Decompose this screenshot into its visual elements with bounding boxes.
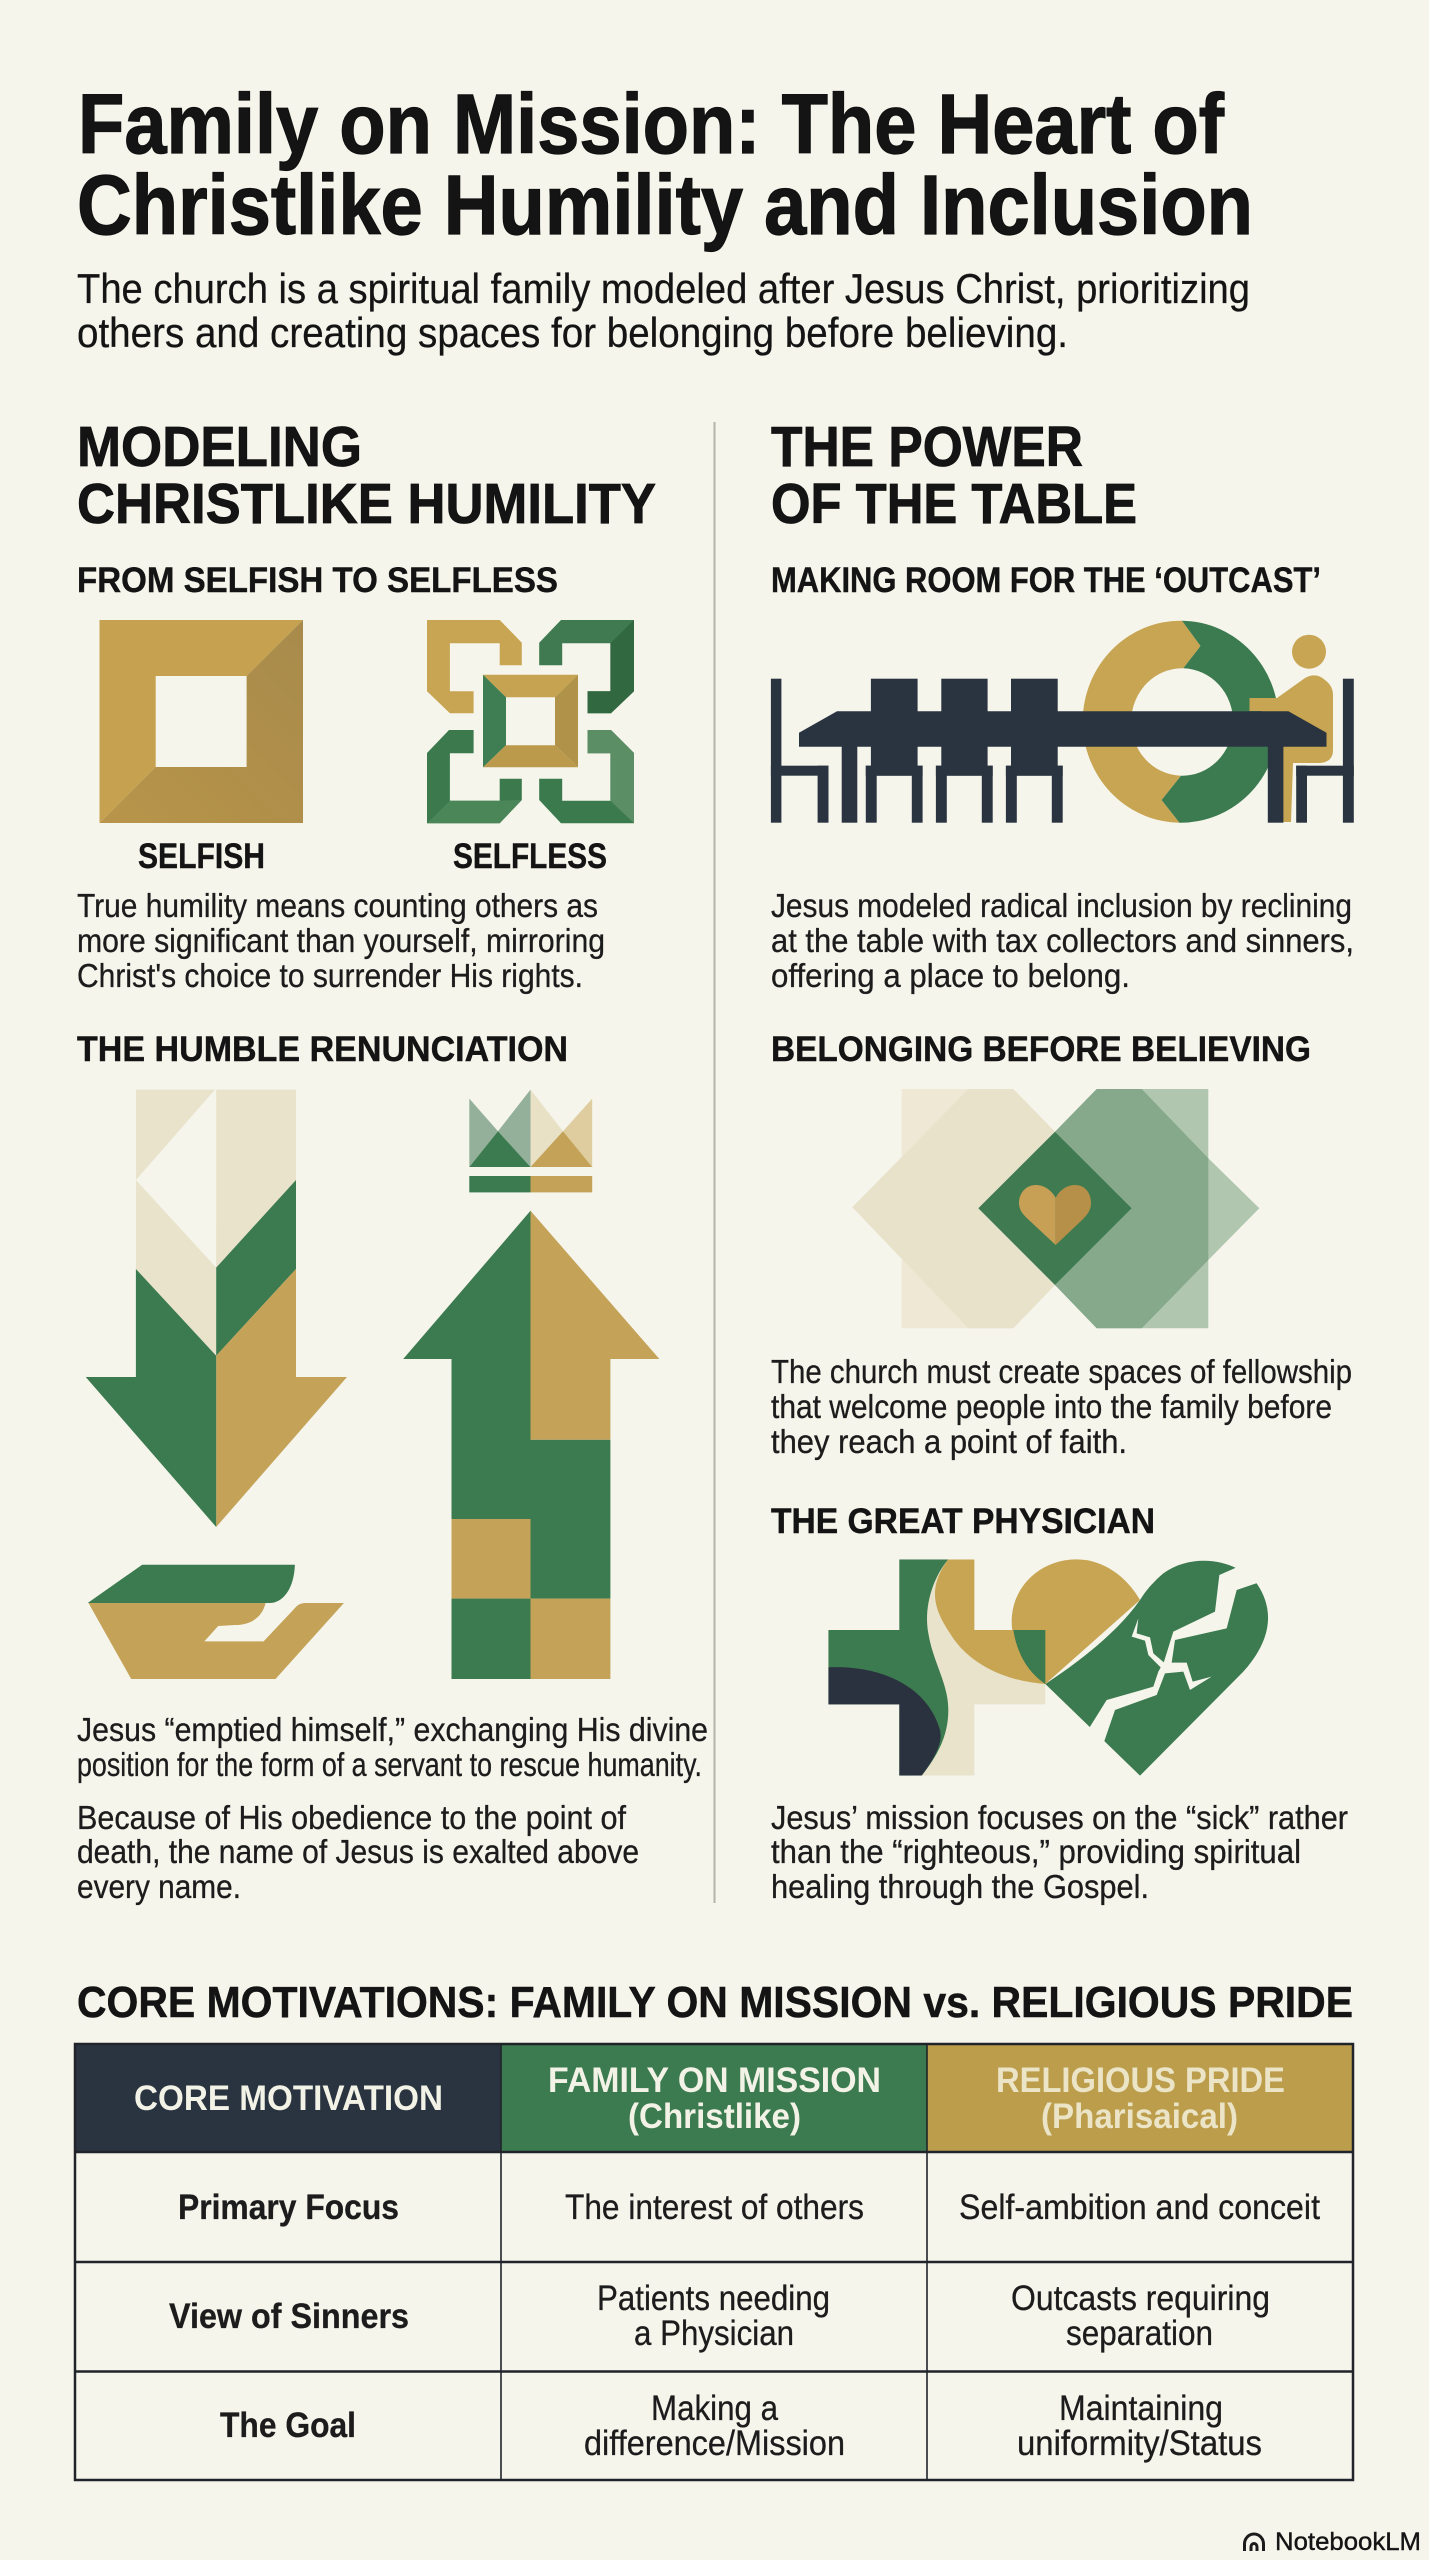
- row: the goal: Making a: [651, 2389, 778, 2428]
- row: the goal: uniformity/Status: [1017, 2424, 1262, 2463]
- text: radical inclusion: [771, 887, 1354, 994]
- icon: heart: [1019, 1185, 1091, 1245]
- table header: (Christlike): [628, 2097, 801, 2136]
- subheading: from selfish to selfless: FROM SELFISH TO SELFLESS: [77, 561, 558, 600]
- table header: RELIGIOUS PRIDE: [996, 2061, 1285, 2100]
- NotebookLM logo: [1244, 2528, 1421, 2556]
- text: spaces of fellowship: that welcome people into the family before: [771, 1388, 1332, 1425]
- title: Christlike Humility and Inclusion: [77, 158, 1253, 252]
- row: view of sinners: Patients needing: [597, 2279, 830, 2318]
- heart right side: [1045, 1561, 1268, 1776]
- row: the goal: difference/Mission: [584, 2424, 845, 2463]
- subheading: making room: MAKING ROOM FOR THE ‘OUTCAST’: [771, 561, 1321, 600]
- text: radical inclusion: at the table with tax collectors and sinners,: [771, 922, 1354, 959]
- text: obedience: every name.: [77, 1868, 241, 1905]
- row: primary focus: Primary Focus: [178, 2188, 399, 2227]
- text: emptied himself: position for the form of a servant to rescue humanity.: [77, 1746, 702, 1783]
- icon: cross and broken heart: [828, 1559, 1268, 1776]
- column divider: [714, 422, 716, 1903]
- heading: modeling Christlike humility: [77, 415, 656, 536]
- row: the goal: [220, 2389, 1262, 2463]
- title: Family on Mission: The Heart of: [78, 77, 1225, 171]
- row: view of sinners: [169, 2279, 1270, 2353]
- ring: [1083, 621, 1279, 823]
- title: [77, 77, 1253, 252]
- panel: the power of the table: [771, 415, 1354, 1905]
- subtitle: The church is a spiritual family modeled after Jesus Christ, prioritizing: [77, 265, 1250, 312]
- label: NotebookLM: NotebookLM: [1275, 2528, 1421, 2556]
- text: true humility: more significant than yourself, mirroring: [77, 922, 605, 959]
- icon: overlapping shapes with heart: [852, 1089, 1259, 1328]
- row: primary focus: Self-ambition and conceit: [959, 2188, 1320, 2227]
- heading: the power of the table: [771, 415, 1137, 536]
- icon: up arrow: [403, 1211, 659, 1679]
- table header: FAMILY ON MISSION: [548, 2061, 881, 2100]
- table and chairs: [771, 679, 1354, 823]
- heart crack: [1088, 1563, 1258, 1742]
- seated person: [1250, 635, 1333, 822]
- text: obedience: Because of His obedience to the point of: [77, 1799, 627, 1836]
- subheading: belonging before believing: BELONGING BEFORE BELIEVING: [771, 1030, 1311, 1069]
- heart left lobe: [1012, 1559, 1140, 1684]
- row: primary focus: The interest of others: [565, 2188, 864, 2227]
- row: primary focus: [178, 2188, 1320, 2227]
- icon: down arrow: [86, 1090, 347, 1527]
- subtitle: [77, 265, 1250, 356]
- heading: modeling Christlike humility: MODELING: [77, 415, 362, 479]
- heading: the power of the table: OF THE TABLE: [771, 472, 1137, 536]
- text: true humility: Christ's choice to surrender His rights.: [77, 957, 583, 994]
- row: view of sinners: View of Sinners: [169, 2297, 409, 2336]
- subheading: the great physician: THE GREAT PHYSICIAN: [771, 1502, 1155, 1541]
- text: obedience: [77, 1799, 639, 1905]
- row: view of sinners: Outcasts requiring: [1011, 2279, 1270, 2318]
- icon: open hand: [88, 1565, 344, 1679]
- text: the sick: Jesus’ mission focuses on the “sick” rather: [771, 1799, 1348, 1836]
- heading: modeling Christlike humility: CHRISTLIKE HUMILITY: [77, 472, 656, 536]
- comparison table: [75, 2044, 1353, 2480]
- label: selfish: SELFISH: [138, 837, 265, 876]
- text: the sick: [771, 1799, 1348, 1905]
- text: the sick: healing through the Gospel.: [771, 1868, 1149, 1905]
- lens overlap: [1013, 1630, 1045, 1684]
- text: obedience: death, the name of Jesus is exalted above: [77, 1833, 639, 1870]
- row: view of sinners: a Physician: [634, 2314, 794, 2353]
- text: emptied himself: Jesus “emptied himself,” exchanging His divine: [77, 1711, 708, 1748]
- text: radical inclusion: offering a place to belong.: [771, 957, 1130, 994]
- cross: [828, 1559, 1046, 1776]
- comparison section heading: CORE MOTIVATIONS: FAMILY ON MISSION vs. RELIGIOUS PRIDE: [77, 1978, 1353, 2027]
- row: the goal: Maintaining: [1059, 2389, 1223, 2428]
- label: selfless: SELFLESS: [453, 837, 607, 876]
- panel: modeling Christlike humility: [77, 415, 708, 1905]
- text: true humility: True humility means counting others as: [77, 887, 598, 924]
- text: radical inclusion: Jesus modeled radical inclusion by reclining: [771, 887, 1352, 924]
- table grid lines: [75, 2044, 1353, 2480]
- text: the sick: than the “righteous,” providing spiritual: [771, 1833, 1301, 1870]
- icon: table with chairs and seated person: [771, 621, 1354, 823]
- text: spaces of fellowship: they reach a point of faith.: [771, 1423, 1127, 1460]
- icon: selfless interlocking squares: [427, 620, 634, 823]
- subheading: the humble renunciation: THE HUMBLE RENUNCIATION: [77, 1030, 568, 1069]
- row: the goal: The Goal: [220, 2406, 356, 2445]
- row: view of sinners: separation: [1066, 2314, 1213, 2353]
- subtitle: others and creating spaces for belonging before believing.: [77, 309, 1068, 356]
- table header: CORE MOTIVATION: [134, 2079, 443, 2118]
- heading: the power of the table: THE POWER: [771, 415, 1083, 479]
- icon: crown: [469, 1090, 592, 1192]
- icon: selfish square: [100, 620, 303, 823]
- text: emptied himself: [77, 1711, 708, 1783]
- table header: [75, 2044, 1353, 2152]
- text: true humility: [77, 887, 605, 994]
- table header: (Pharisaical): [1041, 2097, 1238, 2136]
- text: spaces of fellowship: [771, 1353, 1352, 1460]
- text: spaces of fellowship: The church must create spaces of fellowship: [771, 1353, 1352, 1390]
- icon: NotebookLM mark: [1244, 2534, 1264, 2551]
